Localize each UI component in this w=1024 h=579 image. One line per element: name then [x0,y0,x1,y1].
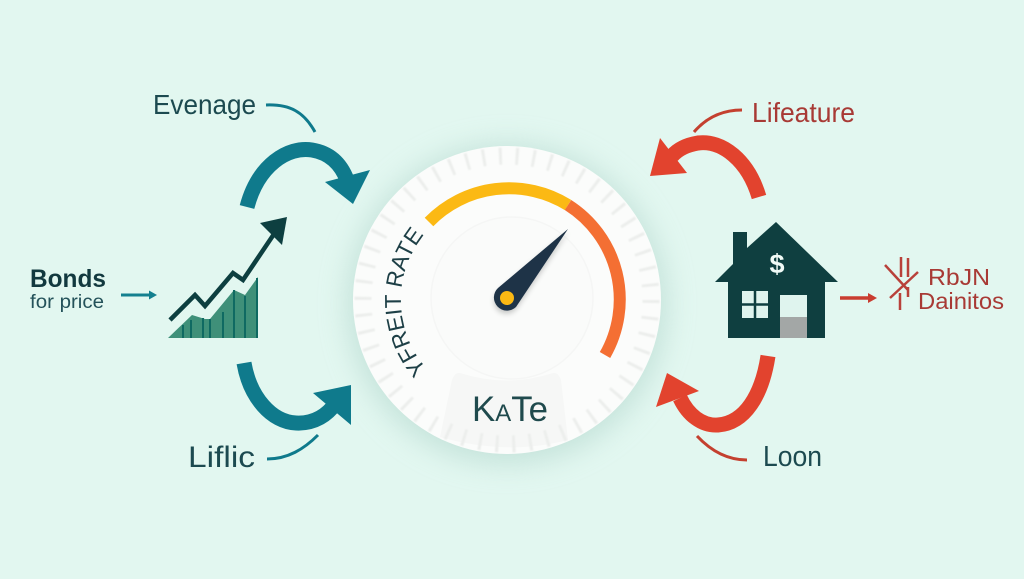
bottom teal arrow [244,363,351,425]
bonds label [30,265,106,313]
house icon [715,222,838,338]
door [780,295,807,317]
rising chart icon [168,217,287,338]
result label: RbJN [928,264,990,290]
label: Loon: Loon [763,441,822,473]
dial tick marks [363,156,651,444]
connector: Loon [697,436,747,460]
result label: Dainitos [918,288,1004,314]
connector: Evenage [266,105,315,132]
bonds label: Bonds [30,265,106,293]
dial face [353,146,661,454]
label: Liflic: Liflic [188,441,255,474]
connector: Liflic [267,435,318,459]
dial gauge [340,136,674,472]
needle [494,229,568,313]
rate plate [440,373,568,447]
top red arrow [650,138,759,197]
arrow: house to result [840,293,877,303]
dollar sign: $ [769,249,785,279]
label: Evenage: Evenage [153,89,256,120]
inner dial circle [431,217,593,379]
right group: housing [650,97,1004,473]
left group: bonds [30,89,370,474]
top teal arrow [247,149,370,207]
result label [918,264,1004,314]
curved dial label: YFREIT RATE [385,226,424,378]
arrow: bonds to chart [121,290,157,300]
bottom red arrow [656,356,768,425]
gauge yellow arc [429,188,568,222]
window [742,291,768,318]
label: Lifeature: Lifeature [752,97,855,128]
rate label: KATe [472,390,548,429]
bonds label: for price [30,292,104,313]
result glyph icon [885,257,918,310]
connector: Lifeature [694,110,742,132]
gauge orange arc [568,205,620,355]
